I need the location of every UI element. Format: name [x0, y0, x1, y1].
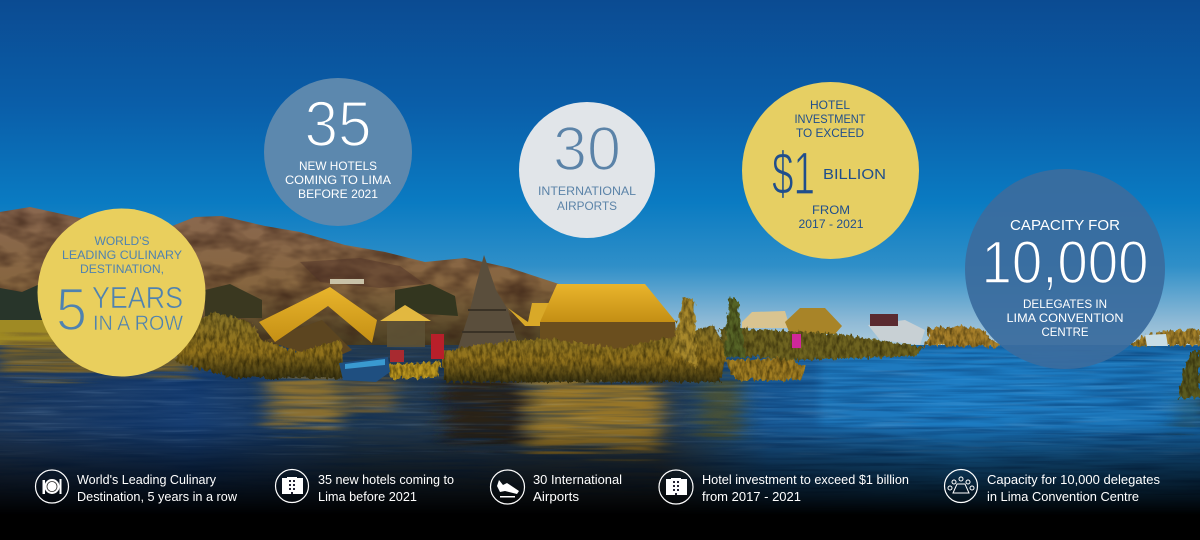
investment heading: HOTEL: [810, 98, 850, 112]
legend: capacity: [944, 470, 1160, 504]
background: mountains: [0, 207, 600, 346]
legend: investment: [659, 470, 909, 504]
investment heading: TO EXCEED: [796, 126, 864, 140]
reed islands with huts: [176, 255, 1168, 382]
circle: convention capacity: [965, 169, 1165, 369]
culinary figure: 5: [56, 276, 87, 343]
hotels text: Lima before 2021: [318, 489, 417, 504]
icon: landing plane: [490, 470, 524, 504]
culinary heading: LEADING CULINARY: [62, 248, 182, 262]
capacity caption: [1006, 297, 1124, 339]
airports text: [533, 472, 622, 504]
icon: hotel building: [276, 470, 308, 502]
hotels text: [318, 472, 454, 504]
culinary text: [77, 472, 238, 504]
investment figure: BILLION: [823, 166, 886, 183]
icon: meeting table with delegates: [944, 470, 978, 502]
hotels caption: COMING TO LIMA: [285, 173, 391, 187]
investment text: from 2017 - 2021: [702, 489, 801, 504]
culinary text: Destination, 5 years in a row: [77, 489, 238, 504]
investment text: Hotel investment to exceed $1 billion: [702, 472, 909, 487]
airports text: Airports: [533, 489, 580, 504]
background: sky: [0, 0, 1200, 350]
background: distant shoreline: [925, 326, 1200, 398]
capacity text: in Lima Convention Centre: [987, 489, 1139, 504]
hotels text: 35 new hotels coming to: [318, 472, 454, 487]
airports figure: 30: [553, 115, 621, 184]
investment text: [702, 472, 909, 504]
icon: hotel building: [659, 470, 693, 504]
hut: umbrella: [380, 305, 431, 347]
hut: left: [259, 279, 377, 362]
distant huts: [742, 308, 842, 334]
capacity caption: LIMA CONVENTION: [1006, 311, 1124, 325]
culinary figure: [56, 276, 183, 343]
airports caption: AIRPORTS: [557, 199, 617, 213]
airports caption: INTERNATIONAL: [538, 184, 636, 198]
figures and boats: [339, 314, 1168, 382]
bottom fade to black: [0, 425, 1200, 515]
culinary heading: DESTINATION,: [80, 262, 164, 276]
hut: reed tower: [458, 255, 520, 362]
investment figure: $1: [772, 140, 815, 207]
hotels figure: 35: [304, 88, 372, 160]
capacity text: [987, 472, 1160, 504]
investment heading: [794, 98, 866, 140]
legend: new hotels: [276, 470, 454, 504]
hut: right: [508, 284, 678, 350]
capacity heading: CAPACITY FOR: [1010, 218, 1120, 234]
airports caption: [538, 184, 636, 213]
circle: new hotels: [264, 78, 412, 226]
capacity caption: DELEGATES IN: [1023, 297, 1107, 311]
culinary figure: IN A ROW: [93, 312, 183, 335]
investment heading: INVESTMENT: [794, 112, 866, 126]
hotels caption: [285, 159, 391, 201]
circle: hotel investment: [742, 82, 919, 259]
hotels caption: BEFORE 2021: [298, 187, 378, 201]
legend row: [36, 470, 1160, 504]
legend: culinary: [36, 470, 238, 504]
investment figure: [772, 140, 886, 207]
circle: culinary destination: [38, 208, 206, 376]
capacity figure: 10,000: [982, 229, 1148, 296]
culinary figure: YEARS: [92, 280, 183, 315]
background: lake water: [0, 340, 1200, 540]
investment period: 2017 - 2021: [798, 217, 864, 231]
investment period: FROM: [812, 203, 850, 217]
icon: plate and cutlery: [36, 470, 68, 503]
hotels caption: NEW HOTELS: [299, 159, 377, 173]
circle: international airports: [519, 102, 655, 238]
airports text: 30 International: [533, 472, 622, 487]
culinary text: World's Leading Culinary: [77, 472, 216, 487]
capacity caption: CENTRE: [1042, 325, 1088, 339]
capacity text: Capacity for 10,000 delegates: [987, 472, 1160, 487]
investment period: [798, 203, 864, 231]
culinary heading: WORLD'S: [94, 234, 150, 248]
culinary heading: [62, 234, 182, 276]
legend: airports: [490, 470, 622, 504]
